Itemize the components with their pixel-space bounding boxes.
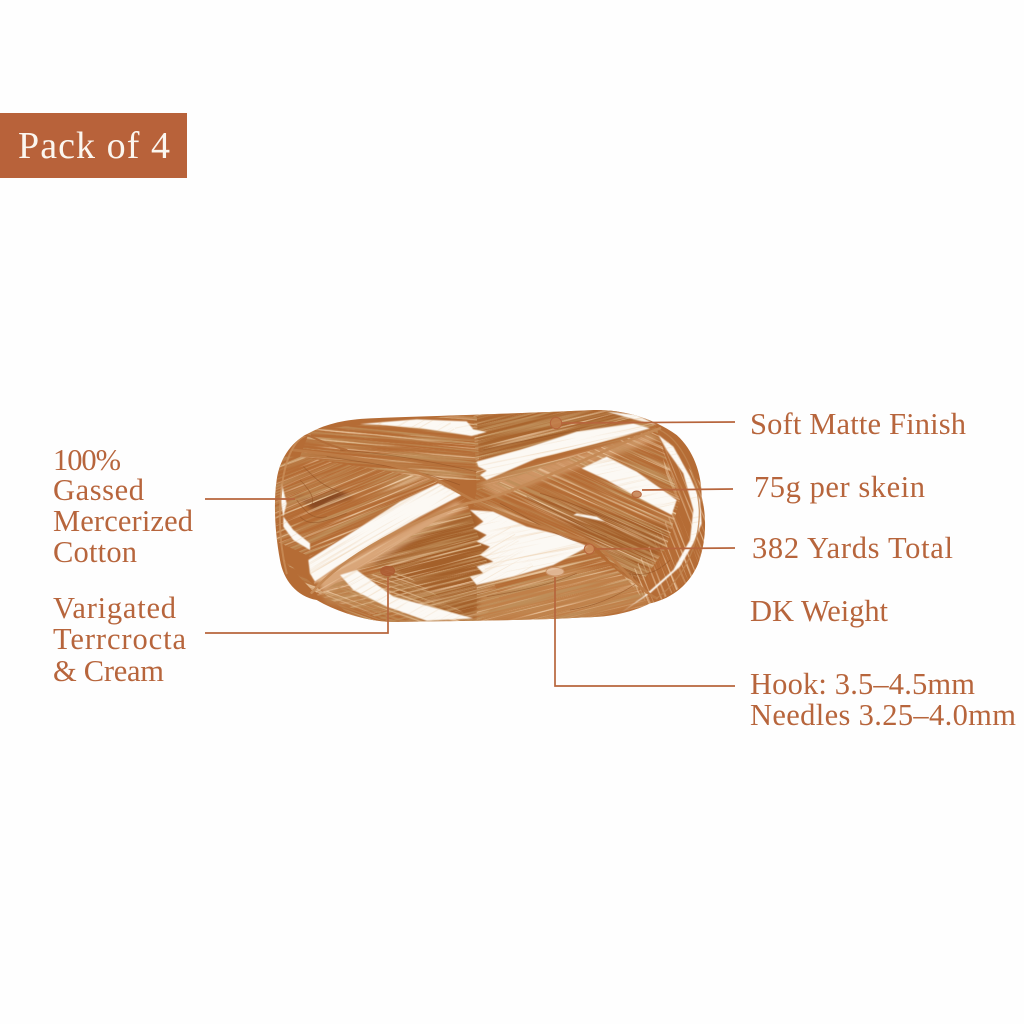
- wrap cords: [280, 428, 699, 598]
- cream patches: [281, 412, 702, 621]
- fibre texture on cream patches: [282, 416, 701, 619]
- fibre texture: [300, 415, 480, 480]
- label: material: [53, 443, 193, 569]
- yarn skein illustration: [274, 410, 706, 622]
- label: hook and needle sizes: [750, 667, 1016, 732]
- tonal regions: [293, 410, 670, 622]
- label: hook and needle sizes: Hook: 3.5–4.5mm: [750, 667, 975, 701]
- badge: Pack of 4: [0, 113, 187, 178]
- label: colour: & Cream: [53, 654, 164, 688]
- callout dots: [381, 417, 641, 576]
- label: finish: Soft Matte Finish: [750, 407, 966, 441]
- label: colour: Varigated: [53, 591, 176, 625]
- label: weight per skein: 75g per skein: [754, 470, 925, 504]
- label: hook and needle sizes: Needles 3.25–4.0mm: [750, 698, 1016, 732]
- label: material: Mercerized: [53, 504, 193, 538]
- label: colour: Terrcrocta: [53, 622, 186, 656]
- yarn strands: dark: [297, 430, 670, 610]
- label: material: 100%: [53, 443, 121, 477]
- label: colour: [53, 591, 186, 688]
- label: material: Cotton: [53, 535, 137, 569]
- badge: Pack of 4: Pack of 4: [18, 125, 170, 167]
- label: yardage: 382 Yards Total: [752, 531, 953, 565]
- label: DK weight: DK Weight: [750, 594, 889, 628]
- label: material: Gassed: [53, 473, 144, 507]
- leader lines: [205, 422, 735, 686]
